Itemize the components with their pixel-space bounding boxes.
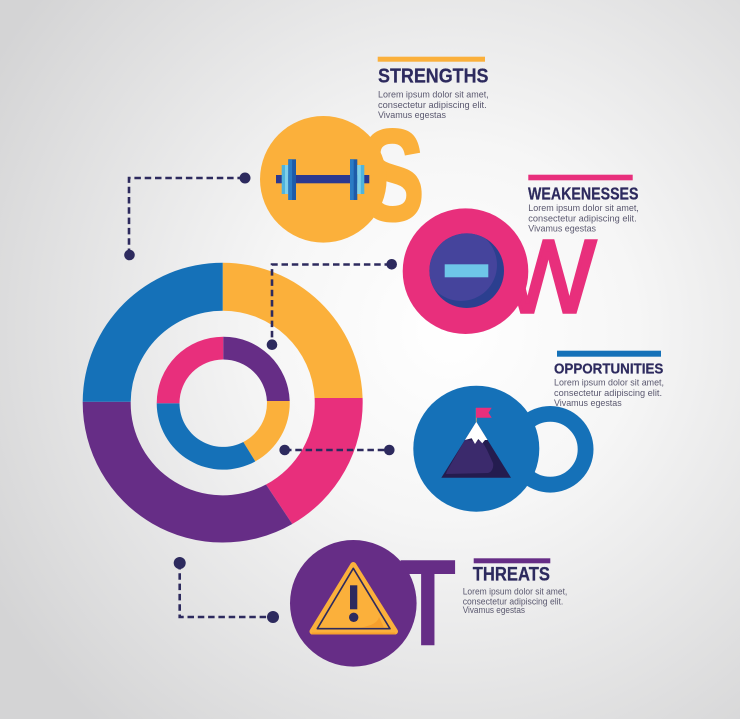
badge: threats circle [290, 540, 417, 667]
badge: weaknesses circle [403, 208, 528, 334]
badge: opportunities circle [413, 386, 539, 512]
heading block: weakenesses: consectetur adipiscing elit. [528, 214, 637, 225]
connector: opportunities [279, 445, 395, 455]
heading block: threats: THREATS [473, 565, 550, 586]
letter T: T [400, 535, 456, 673]
heading block: weakenesses: Lorem ipsum dolor sit amet, [528, 203, 639, 214]
heading block: opportunities: Vivamus egestas [554, 398, 622, 409]
outer donut chart [83, 263, 363, 543]
heading block: opportunities [554, 351, 664, 409]
connector: weaknesses [267, 259, 397, 350]
heading block: opportunities: OPPORTUNITIES [554, 362, 664, 378]
heading block: weakenesses [528, 175, 639, 235]
icon: warning triangle [311, 565, 396, 634]
connector: threats [174, 557, 279, 623]
heading block: strengths: STRENGTHS [378, 64, 488, 87]
heading block: threats: consectetur adipiscing elit. [463, 597, 563, 608]
badge: strengths circle [260, 116, 387, 243]
heading block: strengths: Lorem ipsum dolor sit amet, [378, 90, 489, 101]
heading block: threats: Vivamus egestas [463, 605, 525, 616]
heading block: strengths [378, 57, 489, 121]
connector: strengths [124, 172, 250, 260]
heading block: strengths: consectetur adipiscing elit. [378, 100, 487, 111]
letter S: S [360, 103, 424, 248]
heading block: threats [463, 558, 567, 616]
letter O ring [515, 414, 586, 485]
heading block: weakenesses: Vivamus egestas [528, 224, 596, 235]
heading block: opportunities: consectetur adipiscing elit. [554, 388, 662, 399]
icon: mountain with flag [441, 408, 511, 478]
heading block: opportunities: Lorem ipsum dolor sit amet, [554, 378, 664, 389]
heading block: strengths: Vivamus egestas [378, 110, 446, 121]
heading block: threats: Lorem ipsum dolor sit amet, [463, 586, 567, 597]
letter W: W [501, 219, 596, 334]
icon: minus sign [425, 229, 504, 308]
inner donut chart [157, 337, 290, 470]
icon: dumbbell [276, 159, 369, 200]
heading block: weakenesses: WEAKENESSES [528, 183, 638, 203]
